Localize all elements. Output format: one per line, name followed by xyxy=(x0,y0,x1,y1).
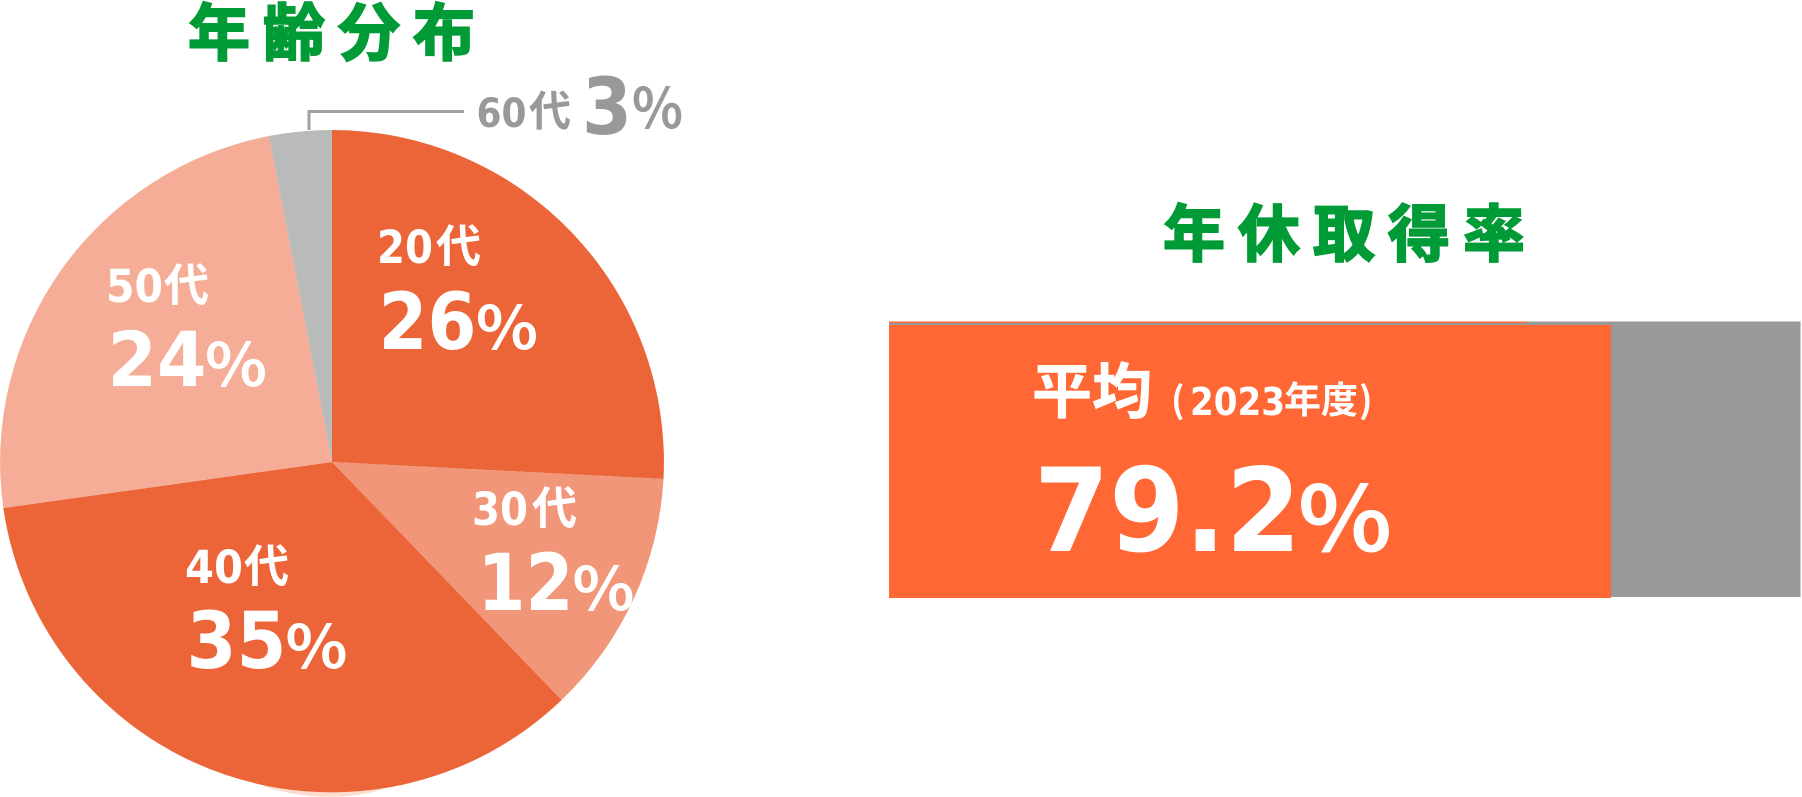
label: 50s 24% xyxy=(106,249,267,404)
label: 60s 3%: 60 xyxy=(476,91,526,137)
slice: 30s xyxy=(332,462,664,700)
panel: annual leave rate xyxy=(889,184,1800,598)
label: 40s 35% xyxy=(185,530,348,687)
label: 40s 35%: % xyxy=(286,599,348,686)
panel: age distribution xyxy=(0,0,683,797)
leader line: 60s xyxy=(309,112,464,130)
bar value: % xyxy=(1298,447,1392,577)
bar label: average: 平均 xyxy=(1032,344,1152,431)
bar label: average: ( xyxy=(1171,372,1185,424)
label: 30s 12% xyxy=(472,472,634,629)
label: 60s 3%: % xyxy=(632,64,683,145)
bar value: 79.2 xyxy=(1034,444,1301,579)
label: 30s 12%: 代 xyxy=(532,472,577,537)
label: 20s 26% xyxy=(377,210,538,368)
label: 30s 12%: 12 xyxy=(478,539,574,629)
slice: 40s xyxy=(3,462,562,792)
slice: 60s xyxy=(269,130,332,462)
label: 50s 24%: 24 xyxy=(108,315,206,404)
label: 30s 12%: % xyxy=(572,541,634,628)
bar label: average: 年度 xyxy=(1284,370,1358,424)
label: 40s 35%: 40 xyxy=(185,541,243,594)
slice: 50s xyxy=(0,136,332,508)
label: 20s 26%: 代 xyxy=(436,210,481,275)
pie chart xyxy=(0,130,664,797)
label: 40s 35%: 35 xyxy=(186,597,286,687)
label: 20s 26%: 20 xyxy=(377,221,433,274)
label: 50s 24%: 50 xyxy=(106,260,163,313)
bar label: average xyxy=(1032,344,1373,431)
label: 50s 24%: 代 xyxy=(164,249,209,314)
bar fill xyxy=(889,325,1611,598)
label: 20s 26%: 26 xyxy=(378,278,476,368)
bar top line xyxy=(889,322,1527,323)
bar label: average: ) xyxy=(1359,372,1373,424)
heading: annual leave rate: 年休取得率 xyxy=(1163,184,1538,274)
slice: 20s xyxy=(332,130,664,479)
label: 60s 3% xyxy=(476,63,683,153)
label: 30s 12%: 30 xyxy=(472,483,528,536)
bar track xyxy=(889,322,1800,597)
label: 50s 24%: % xyxy=(205,317,267,404)
label: 60s 3%: 代 xyxy=(529,78,571,139)
label: 60s 3%: 3 xyxy=(582,63,632,153)
label: 20s 26%: % xyxy=(476,280,538,367)
bar label: average: 2023 xyxy=(1190,380,1285,424)
label: 40s 35%: 代 xyxy=(244,530,289,595)
